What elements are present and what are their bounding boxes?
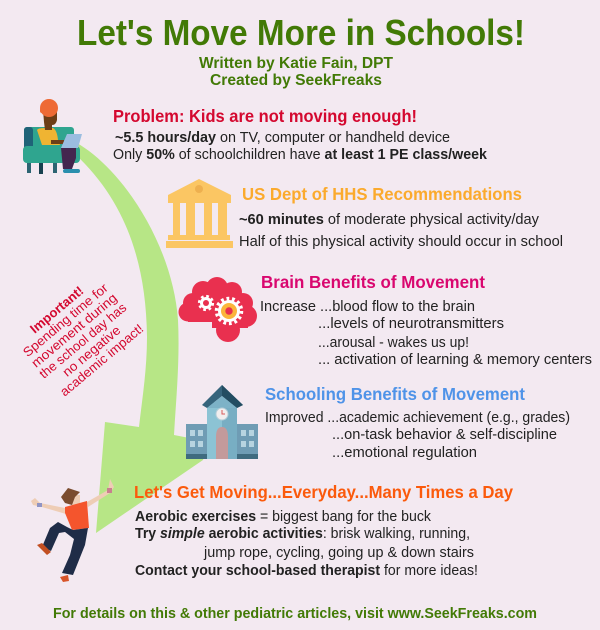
panel: brain benefits: Brain Benefits of Movement — [261, 272, 485, 292]
panel: schooling benefits: Improved ...academic achievement (e.g., grades) — [265, 410, 570, 426]
panel: schooling benefits: Schooling Benefits of Movement — [265, 384, 525, 404]
panel: schooling benefits: ...emotional regulation — [332, 445, 477, 461]
panel: let's get moving: Try simple aerobic activities: brisk walking, running, — [135, 526, 470, 542]
important note — [10, 269, 147, 402]
title: Let's Move More in Schools! — [77, 12, 525, 53]
panel: let's get moving: Contact your school-based therapist for more ideas! — [135, 563, 478, 579]
panel: brain benefits: ... activation of learning & memory centers — [318, 352, 592, 368]
panel: US Dept of HHS: US Dept of HHS Recommendations — [242, 184, 522, 204]
panel: schooling benefits — [265, 384, 570, 461]
byline: Created by SeekFreaks — [210, 72, 382, 89]
footer: For details on this & other pediatric articles, visit www.SeekFreaks.com — [53, 605, 537, 622]
panel: schooling benefits: ...on-task behavior & self-discipline — [332, 427, 557, 443]
panel: let's get moving: Aerobic exercises = biggest bang for the buck — [135, 509, 432, 525]
panel: problem: Problem: Kids are not moving enough! — [113, 106, 417, 126]
byline: Written by Katie Fain, DPT — [199, 55, 393, 72]
important note: no negative — [59, 322, 123, 380]
important note: movement during — [28, 290, 120, 370]
important note: Important! — [27, 283, 86, 336]
panel: problem: Only 50% of schoolchildren have at least 1 PE class/week — [113, 147, 488, 163]
panel: brain benefits — [260, 272, 592, 368]
icon: child on laptop in armchair — [23, 99, 82, 174]
panel: let's get moving: jump rope, cycling, going up & down stairs — [203, 545, 474, 561]
panel: brain benefits: ...arousal - wakes us up! — [318, 335, 469, 351]
panel: problem: ~5.5 hours/day on TV, computer or handheld device — [115, 130, 450, 146]
panel: US Dept of HHS: ~60 minutes of moderate physical activity/day — [239, 212, 540, 228]
panel: US Dept of HHS: Half of this physical activity should occur in school — [239, 234, 563, 250]
panel: brain benefits: Increase ...blood flow to the brain — [260, 299, 475, 315]
important note: Spending time for — [20, 280, 111, 360]
icon: jumping child — [31, 479, 114, 582]
panel: let's get moving: Let's Get Moving...Everyday...Many Times a Day — [134, 482, 513, 502]
panel: US Dept of HHS — [239, 184, 563, 250]
panel: let's get moving — [134, 482, 513, 579]
icon: government building — [166, 179, 233, 248]
panel: brain benefits: ...levels of neurotransmitters — [318, 316, 504, 332]
icon: school building — [186, 385, 258, 459]
byline — [199, 55, 393, 89]
icon: brain with gears — [178, 277, 257, 342]
important note: academic impact! — [57, 321, 146, 399]
curved green arrow — [58, 135, 210, 533]
important note: the school day has — [36, 300, 130, 381]
panel: problem — [113, 106, 488, 163]
